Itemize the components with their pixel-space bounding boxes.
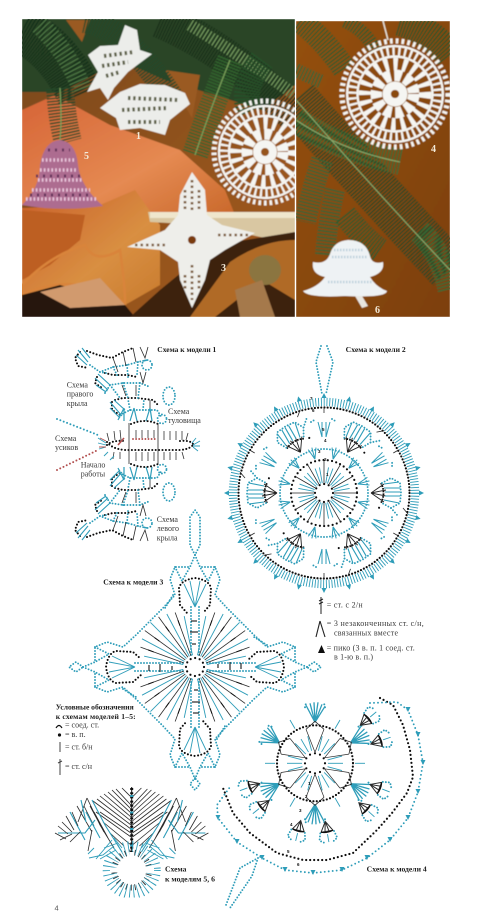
ornament 3: cross doily	[127, 172, 255, 308]
row numbers	[287, 781, 311, 867]
label: right wing: крыла	[67, 399, 88, 408]
four arms	[83, 555, 307, 779]
label: antennae: усиков	[55, 443, 78, 452]
fan sectors	[234, 393, 414, 593]
photo background	[22, 66, 295, 315]
label: left wing: крыла	[157, 534, 178, 543]
small black fans on outer part	[236, 704, 395, 845]
ornament 2: round doily	[210, 98, 295, 206]
outer black row	[223, 698, 413, 860]
symbol: picot: в 1-ю в. п.)	[334, 652, 373, 661]
model numbers on left photo: 1	[136, 131, 141, 142]
symbol: three unfinished stitches: связанных вместе	[334, 629, 398, 638]
orange gaps between branches	[66, 20, 200, 118]
spine	[131, 787, 133, 855]
hanging loop	[316, 346, 333, 394]
label: body: туловища	[168, 416, 201, 425]
label: right wing: правого	[67, 390, 93, 399]
brown backdrop	[296, 21, 450, 317]
symbol: three unfinished stitches: = 3 незаконченных ст. с/н,	[327, 619, 424, 628]
hanging thread	[383, 21, 388, 40]
chart: scheme for model 4, round doily	[216, 698, 427, 908]
symbol: picot	[318, 644, 415, 661]
label: start: работы	[81, 470, 106, 479]
row numbers: 5	[322, 427, 325, 432]
hanging loop	[226, 858, 258, 908]
photo panel: left, ornaments 1, 2, 3, 5	[22, 19, 316, 317]
fir branches	[160, 20, 295, 115]
symbol: chain: = в. п.	[65, 730, 86, 739]
row numbers: 7	[310, 396, 313, 401]
model numbers on right photo: 6	[375, 305, 380, 316]
symbol: treble: = ст. с/н	[65, 762, 93, 771]
spoke quadrants	[140, 612, 250, 722]
outer ring	[224, 393, 424, 593]
symbol: picot: = пико (3 в. п. 1 соед. ст.	[327, 644, 415, 653]
symbol: double crochet: = ст. с 2/н	[327, 600, 363, 609]
centre, ring and fans	[250, 702, 380, 824]
symbol: single crochet: = ст. б/н	[65, 742, 93, 751]
legend: symbols left	[56, 702, 136, 775]
heading: Схема	[165, 865, 187, 874]
centre ring	[186, 658, 204, 676]
label: left wing: Схема	[157, 515, 178, 524]
lower wing, mirrored	[75, 464, 175, 541]
coral fabric	[22, 95, 235, 215]
chart: scheme for models 5, 6, bell	[55, 787, 215, 892]
dark folds, bottom right	[130, 232, 295, 317]
model numbers on right photo	[375, 144, 436, 316]
row numbers: 6	[297, 862, 300, 867]
legend: symbols right	[316, 597, 424, 661]
row numbers: 5	[287, 849, 290, 854]
symbol: slip stitch: = соед. ст.	[65, 720, 99, 730]
dark foliage backdrop	[22, 19, 295, 110]
right half of bell, mirrored	[132, 788, 208, 859]
left half of bell	[55, 788, 131, 859]
basket rim	[148, 212, 295, 238]
label: left wing: левого	[157, 524, 179, 533]
hanging loops	[69, 510, 321, 790]
heading: Схема к модели 1	[157, 345, 216, 354]
row numbers: 3	[318, 449, 321, 454]
ornament 6: white bell	[303, 240, 387, 308]
inner rings and spokes	[276, 445, 372, 541]
label: antennae: Схема	[55, 434, 77, 443]
label: start: Начало	[81, 460, 105, 469]
row numbers: 4	[290, 822, 293, 827]
model numbers on left photo: 3	[221, 263, 226, 274]
chart: scheme for model 1, butterfly	[55, 345, 216, 543]
ornament 5: pink bell	[22, 140, 103, 209]
chart: scheme for model 3, cross doily	[69, 510, 321, 790]
photo panel: right, ornaments 4 and 6	[296, 21, 450, 317]
row numbers	[310, 396, 329, 477]
heading: Схема к модели 2	[346, 345, 406, 354]
bottom ring	[110, 848, 154, 892]
symbol: three unfinished stitches	[316, 619, 424, 638]
page number: 4	[54, 904, 59, 912]
antennae	[57, 419, 98, 470]
picots	[216, 707, 426, 875]
ornament 4: round doily	[342, 41, 448, 147]
row numbers: 1	[308, 781, 311, 786]
bottom shadow and skin tone	[22, 285, 135, 317]
row numbers: 1	[326, 472, 329, 477]
loose dots	[280, 763, 381, 822]
ornament 1: butterfly	[87, 25, 190, 135]
label: right wing: Схема	[67, 380, 88, 390]
heading: Схема к модели 3	[103, 578, 163, 586]
legend heading: к схемам моделей 1–5:	[56, 712, 136, 721]
row numbers: 2	[324, 457, 327, 462]
row numbers: 2	[305, 794, 308, 799]
body	[98, 423, 200, 464]
heading: к моделям 5, 6	[165, 875, 215, 884]
heading: Схема к модели 4	[367, 864, 427, 873]
legend heading: Условные обозначения	[56, 702, 134, 711]
outer blue row	[217, 702, 423, 873]
chart: scheme for model 2, round doily	[224, 345, 424, 593]
fir branches	[296, 100, 450, 270]
model numbers on left photo: 5	[84, 151, 89, 162]
row numbers: 3	[299, 808, 302, 813]
upper wing	[75, 347, 175, 424]
model numbers on left photo	[84, 131, 226, 274]
orange fabric folds	[22, 190, 160, 305]
label: body: Схема	[168, 407, 190, 416]
row numbers: 4	[324, 438, 327, 443]
row numbers: 6	[312, 408, 315, 413]
model numbers on right photo: 4	[431, 144, 436, 155]
